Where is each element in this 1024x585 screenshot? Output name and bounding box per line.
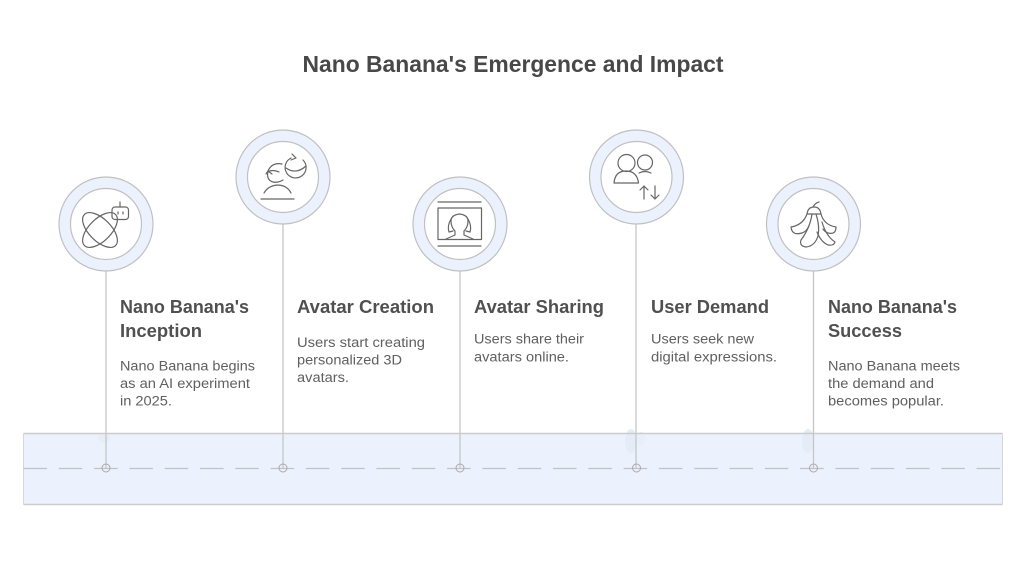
milestone 2: Avatar Creation	[236, 130, 434, 472]
milestone 5: Nano Banana's Success	[766, 177, 960, 472]
milestone 1: Nano Banana's Inception	[59, 177, 255, 472]
connector line 4	[635, 224, 637, 468]
timeline band	[24, 429, 1002, 504]
timeline marker 5	[810, 464, 818, 472]
body text 1: in 2025.	[120, 394, 172, 410]
body text 5	[828, 358, 960, 410]
icon: avatar with rotating head	[236, 130, 330, 224]
body text 3: avatars online.	[474, 350, 569, 366]
connector line 3	[459, 271, 461, 468]
icon: atom orbit with robot	[59, 177, 153, 271]
body text 2: avatars.	[297, 370, 349, 386]
milestone 4: User Demand	[590, 130, 777, 472]
heading 1: Nano Banana's	[120, 296, 249, 317]
body text 5: the demand and	[828, 376, 934, 392]
heading 3: Avatar Sharing	[474, 296, 604, 317]
body text 4: digital expressions.	[651, 350, 777, 366]
body text 5: becomes popular.	[828, 394, 944, 410]
title: Nano Banana's Emergence and Impact	[302, 51, 724, 77]
body text 1: as an AI experiment	[120, 376, 250, 392]
timeline marker 1	[102, 464, 110, 472]
body text 2: personalized 3D	[297, 352, 402, 368]
heading 5: Nano Banana's	[828, 296, 957, 317]
icon: portrait in a window	[413, 177, 507, 271]
connector line 1	[105, 271, 107, 468]
heading 2: Avatar Creation	[297, 296, 434, 317]
timeline marker 2	[279, 464, 287, 472]
body text 1	[120, 358, 255, 410]
connector line 2	[282, 224, 284, 468]
body text 3	[474, 332, 584, 366]
icon: two users with up and down arrows	[590, 130, 684, 224]
timeline marker 3	[456, 464, 464, 472]
milestone 5: Nano Banana's Success: Success	[828, 320, 902, 341]
icon: peeled banana	[766, 177, 860, 271]
body text 5: Nano Banana meets	[828, 358, 960, 374]
connector line 5	[812, 271, 814, 468]
body text 1: Nano Banana begins	[120, 358, 255, 374]
body text 3: Users share their	[474, 332, 584, 348]
timeline marker 4	[632, 464, 640, 472]
body text 4: Users seek new	[651, 332, 755, 348]
milestone 1: Nano Banana's Inception: Inception	[120, 320, 202, 341]
milestone 3: Avatar Sharing	[413, 177, 604, 472]
body text 2	[297, 335, 425, 386]
heading 4: User Demand	[651, 296, 769, 317]
body text 2: Users start creating	[297, 335, 425, 351]
body text 4	[651, 332, 777, 366]
